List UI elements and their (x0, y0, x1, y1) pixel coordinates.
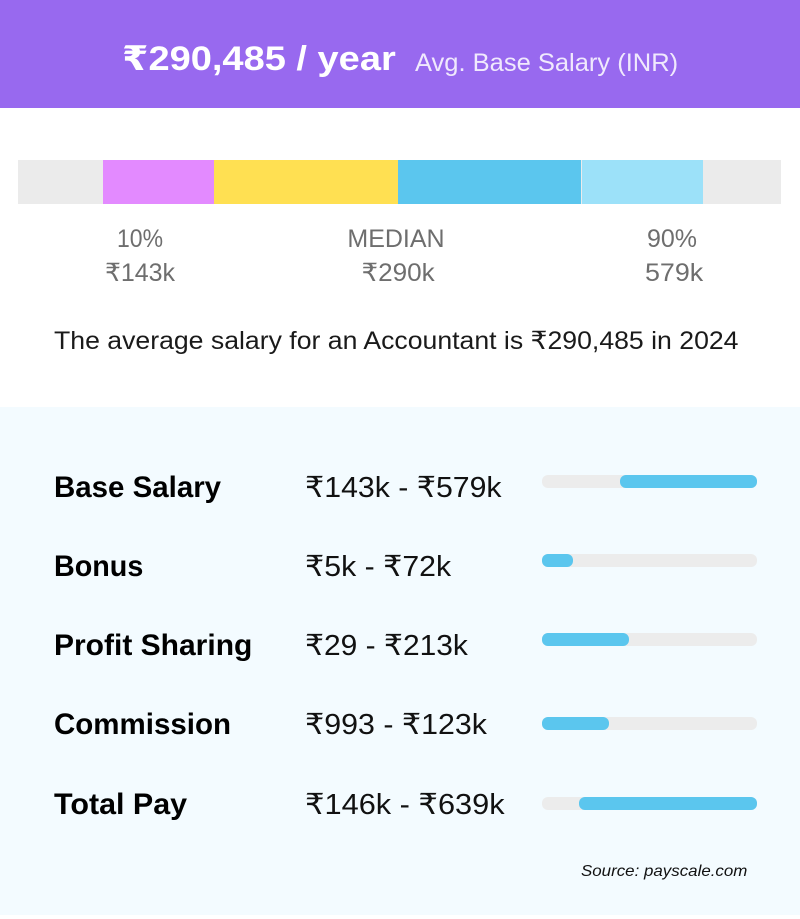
label: 90 percent (645, 225, 704, 287)
row label: base salary: Base Salary (54, 471, 221, 504)
label: 10 percent: 10% (117, 225, 163, 253)
panel: pay breakdown (0, 407, 800, 915)
row value: base salary: ₹143k - ₹579k (305, 472, 502, 504)
header subtitle: Avg. Base Salary (INR) (415, 49, 678, 77)
summary sentence: The average salary for an Accountant is ₹290,485 in 2024 (54, 327, 738, 355)
segment: 75th to 90th (582, 160, 703, 204)
row value: total pay: ₹146k - ₹639k (305, 789, 505, 821)
segment: 25th to median (214, 160, 398, 204)
range bar: base salary (542, 475, 757, 488)
range bar: total pay (542, 797, 757, 810)
range bar: bonus (542, 554, 757, 567)
source note: Source: payscale.com (581, 863, 747, 880)
label: 10 percent: ₹143k (105, 259, 175, 287)
label: 90 percent: 579k (645, 259, 703, 287)
row value: bonus: ₹5k - ₹72k (305, 551, 451, 583)
row label: total pay: Total Pay (54, 788, 187, 821)
range bar: commission (542, 717, 757, 730)
row label: commission: Commission (54, 708, 231, 741)
label: median: MEDIAN (347, 225, 445, 253)
label: 90 percent: 90% (647, 225, 697, 253)
label: median (347, 225, 445, 287)
row label: bonus: Bonus (54, 550, 143, 583)
row value: profit sharing: ₹29 - ₹213k (305, 630, 468, 662)
row value: commission: ₹993 - ₹123k (305, 709, 487, 741)
headline salary: ₹290,485 / year (122, 40, 396, 78)
range bar: profit sharing (542, 633, 757, 646)
percentile bar (18, 160, 781, 204)
header banner (0, 0, 800, 108)
segment: median to 75th (398, 160, 581, 204)
label: 10 percent (105, 225, 175, 287)
label: median: ₹290k (361, 259, 435, 287)
row label: profit sharing: Profit Sharing (54, 629, 252, 662)
segment: 10th to 25th (103, 160, 214, 204)
